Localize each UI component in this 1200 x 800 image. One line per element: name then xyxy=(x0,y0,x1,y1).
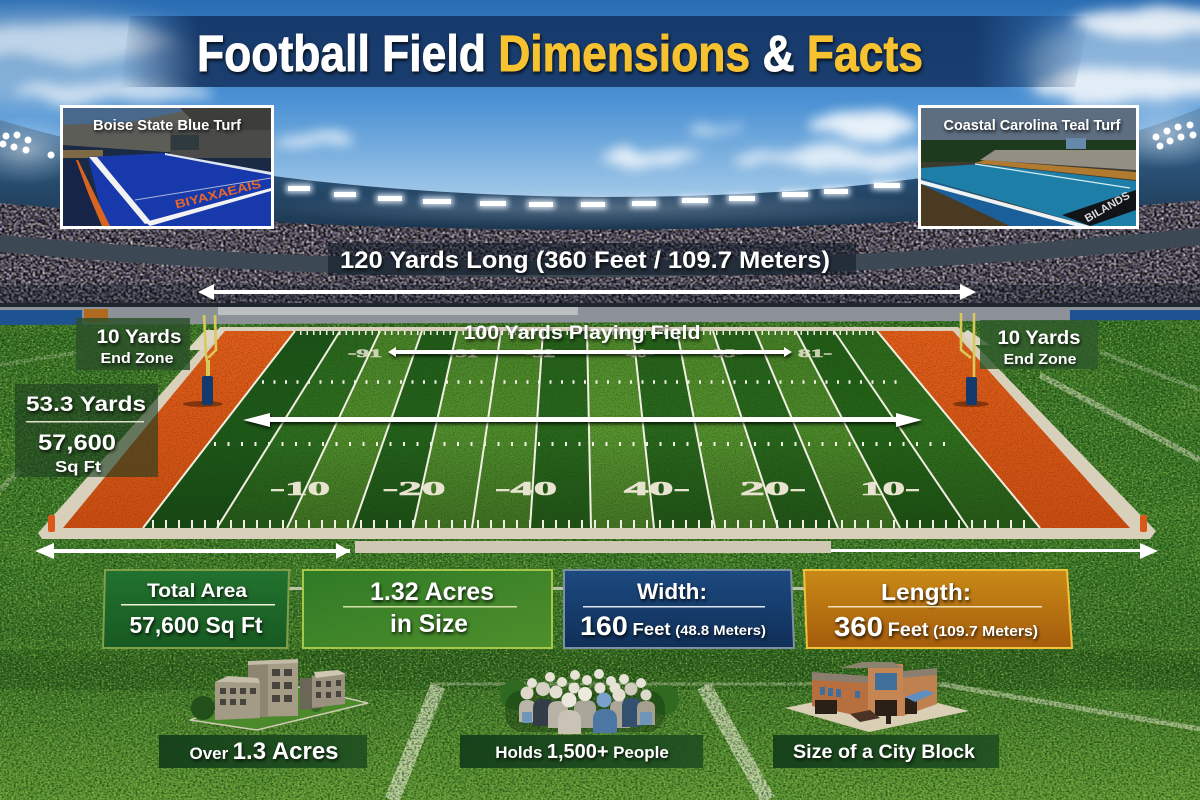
field numbers near sideline: -10 xyxy=(270,478,330,500)
field numbers far sideline: 81- xyxy=(798,346,832,360)
inset photo: Coastal Carolina teal turf: BILANDS xyxy=(1083,190,1132,225)
label: right end zone: 10 Yards xyxy=(998,328,1080,349)
icon: apartment buildings xyxy=(190,659,368,730)
stat card: total area: Total Area xyxy=(147,581,247,602)
sideline wall xyxy=(0,303,1200,327)
field numbers far sideline xyxy=(348,346,832,360)
inset caption: Coastal Carolina Teal Turf xyxy=(944,118,1121,134)
arrow: bottom right xyxy=(831,543,1158,559)
label: right end zone: End Zone xyxy=(1004,352,1076,368)
label: left end zone xyxy=(76,318,190,370)
sideline bench strip xyxy=(355,541,831,553)
end zone texture xyxy=(60,331,1135,528)
caption: holds 1,500+ people xyxy=(460,735,703,768)
caption: over 1.3 acres: Over 1.3 Acres xyxy=(189,738,339,765)
field texture xyxy=(140,331,1045,528)
inset photo: Coastal Carolina teal turf xyxy=(918,105,1139,229)
arrow: bottom left xyxy=(35,543,350,559)
stat card: acres: in Size xyxy=(390,610,468,638)
caption: holds 1,500+ people: Holds 1,500+ People xyxy=(495,741,669,763)
icon: crowd of people xyxy=(500,669,679,734)
stat card: acres: 1.32 Acres xyxy=(370,578,494,606)
label: playing field: 100 Yards Playing Field xyxy=(464,322,700,344)
field numbers near sideline: -40 xyxy=(495,478,557,500)
left goal post xyxy=(183,315,225,407)
inset photo: Boise State blue turf xyxy=(60,105,274,229)
arrow: 100 yards xyxy=(388,347,792,357)
stat card: width: Width: xyxy=(637,579,707,604)
field numbers far sideline: -91 xyxy=(348,346,382,360)
hash marks xyxy=(152,333,1032,524)
label: left end zone: End Zone xyxy=(100,351,174,367)
arrow: 120 yards xyxy=(198,284,976,300)
stat card: total area xyxy=(103,570,289,648)
stat card: width: 160 Feet (48.8 Meters) xyxy=(580,611,766,641)
stadium roof and light banks xyxy=(0,100,1200,270)
title banner xyxy=(120,16,1090,87)
grass surround xyxy=(0,320,1200,800)
stadium fascia band xyxy=(0,228,1200,277)
football field xyxy=(38,327,1156,553)
field numbers near sideline: 10- xyxy=(860,478,920,500)
stadium crowd stands xyxy=(0,200,1200,303)
inset caption: Boise State Blue Turf xyxy=(93,118,241,134)
field numbers near sideline: 40- xyxy=(624,478,690,500)
front row figures xyxy=(558,692,617,734)
right pylon xyxy=(1140,515,1147,532)
right goal post xyxy=(953,313,990,407)
field numbers near sideline: 20- xyxy=(740,478,806,500)
title: Football Field Dimensions & Facts xyxy=(197,25,923,82)
field border xyxy=(38,327,1156,539)
field numbers near sideline xyxy=(270,478,920,500)
caption: over 1.3 acres xyxy=(159,735,367,768)
field numbers far sideline: -31 xyxy=(448,346,478,360)
stat card: acres xyxy=(303,570,552,648)
label: field width and area: Sq Ft xyxy=(55,459,102,476)
right end zone xyxy=(877,331,1130,528)
field numbers far sideline: -32 xyxy=(525,346,555,360)
field numbers far sideline: 35- xyxy=(713,346,743,360)
back row figures xyxy=(519,682,655,728)
sky background with clouds xyxy=(0,0,1200,205)
stat card: length xyxy=(804,570,1072,648)
label: field width and area xyxy=(15,384,158,477)
stat card: total area: 57,600 Sq Ft xyxy=(130,612,263,638)
left pylon xyxy=(48,515,55,532)
connectors between stat cards xyxy=(288,587,804,590)
field numbers near sideline: -20 xyxy=(382,478,446,500)
playing turf stripes xyxy=(143,331,1040,528)
label: field width and area: 53.3 Yards xyxy=(26,393,146,416)
stat card: length: Length: xyxy=(881,579,971,605)
label: total length: 120 Yards Long (360 Feet / 109.7 Meters) xyxy=(340,247,830,274)
inset photo: Boise State blue turf: BIYAXAEAIS xyxy=(174,178,263,212)
label: field width and area: 57,600 xyxy=(38,430,116,455)
stat card: length: 360 Feet (109.7 Meters) xyxy=(834,611,1038,642)
caption: size of a city block xyxy=(773,735,999,768)
label: right end zone xyxy=(980,320,1098,369)
caption: size of a city block: Size of a City Block xyxy=(793,742,975,763)
arrow: field middle xyxy=(243,413,922,427)
icon: city block store xyxy=(785,662,969,732)
field numbers far sideline: 40- xyxy=(626,346,654,360)
label: left end zone: 10 Yards xyxy=(96,327,182,348)
yard lines xyxy=(143,331,1040,528)
left end zone xyxy=(63,331,295,528)
stat card: width xyxy=(564,570,794,648)
